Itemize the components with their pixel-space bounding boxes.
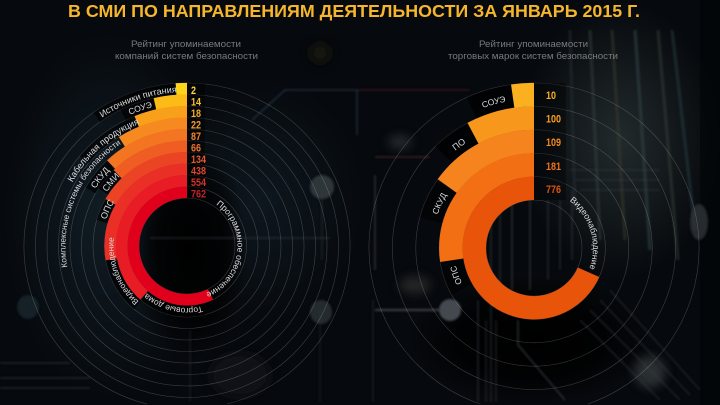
left radial bar chart: company mentions xyxy=(24,82,350,404)
label: Комплексные системы безопасности: Комплексные системы безопасности xyxy=(61,140,121,268)
ring: ОПС xyxy=(111,158,187,202)
right chart heading xyxy=(448,39,618,61)
ring: Программное обеспечение xyxy=(133,192,211,300)
left chart values: 554 xyxy=(191,177,207,189)
ring: ПО xyxy=(473,118,534,133)
ring: СКУД xyxy=(111,135,187,165)
ring: ОПС xyxy=(451,165,534,260)
label: ПО: ПО xyxy=(452,139,465,150)
label: Видеонаблюдение: Видеонаблюдение xyxy=(109,238,138,306)
label: СОУЭ: СОУЭ xyxy=(128,102,152,114)
ring: Видеонаблюдение xyxy=(474,188,589,308)
ring: СКУД xyxy=(447,142,534,186)
right chart heading: Рейтинг упоминаемости xyxy=(479,39,588,49)
right chart values: 100 xyxy=(546,114,561,126)
left chart values: 134 xyxy=(191,154,207,166)
right chart values xyxy=(546,90,561,196)
right chart values: 181 xyxy=(546,161,561,173)
label: СКУД: СКУД xyxy=(432,192,448,214)
label: СМИ: СМИ xyxy=(103,172,120,191)
left chart heading: компаний систем безопасности xyxy=(115,51,258,61)
left chart values xyxy=(191,85,207,200)
label: Торговые дома: Торговые дома xyxy=(145,293,204,313)
ring: СОУЭ xyxy=(513,95,534,96)
right chart values: 776 xyxy=(546,184,561,196)
left chart values: 66 xyxy=(191,142,201,154)
label: СОУЭ: СОУЭ xyxy=(482,96,506,108)
ring: Комплексные системы безопасности xyxy=(122,123,187,142)
ring: Торговые дома xyxy=(122,181,187,295)
label: Источники питания: Источники питания xyxy=(99,88,176,118)
ring: Источники питания xyxy=(176,83,187,95)
left chart values: 22 xyxy=(191,120,201,132)
ring: СОУЭ xyxy=(155,100,187,104)
left chart values: 762 xyxy=(191,188,206,200)
right radial bar chart: brand mentions xyxy=(368,82,700,404)
right chart values: 10 xyxy=(546,90,556,102)
right chart values: 109 xyxy=(546,137,561,149)
ring: СМИ xyxy=(118,146,187,174)
right chart heading: торговых марок систем безопасности xyxy=(448,51,618,61)
ring: Видеонаблюдение xyxy=(110,169,187,259)
left chart heading: Рейтинг упоминаемости xyxy=(131,39,241,49)
label: Программное обеспечение: Программное обеспечение xyxy=(206,200,242,296)
label: ОПС: ОПС xyxy=(101,200,114,218)
left chart values: 18 xyxy=(191,108,201,120)
left chart values: 14 xyxy=(191,96,202,108)
label: ОПС: ОПС xyxy=(450,266,462,284)
ring: Кабельная продукция xyxy=(137,112,187,122)
left chart values: 438 xyxy=(191,166,206,178)
left chart heading xyxy=(115,39,258,61)
label: Видеонаблюдение: Видеонаблюдение xyxy=(570,196,598,270)
title: В СМИ ПО НАПРАВЛЕНИЯМ ДЕЯТЕЛЬНОСТИ ЗА ЯНВАРЬ 2015 Г. xyxy=(68,1,640,21)
label: Кабельная продукция: Кабельная продукция xyxy=(67,120,139,182)
label: СКУД: СКУД xyxy=(92,167,111,188)
left chart values: 2 xyxy=(191,85,196,97)
left chart values: 87 xyxy=(191,131,201,143)
